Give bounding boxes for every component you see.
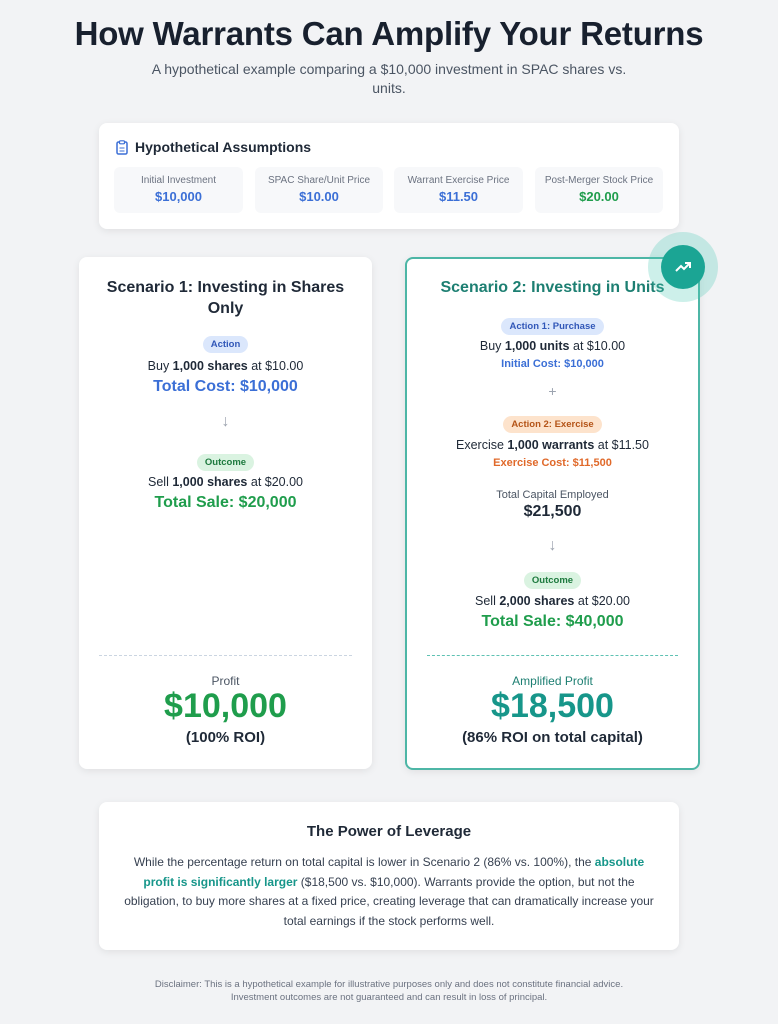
action 2: Action 2: Exercise: [511, 419, 594, 430]
panel: scenario 1: Buy 1,000 shares at $10.00: [148, 359, 303, 373]
panel: scenario 1: $10,000: [164, 687, 287, 725]
subtitle: A hypothetical example comparing a $10,000 investment in SPAC shares vs. units.: [152, 61, 626, 96]
box: initial investment: [114, 167, 243, 213]
disclaimer: [155, 979, 623, 1003]
profit: Profit: [211, 674, 240, 688]
icon: clipboard: [116, 140, 128, 155]
box: post-merger: Post-Merger Stock Price: [545, 175, 653, 186]
panel: scenario 1: (100% ROI): [186, 729, 265, 746]
box: post-merger: $20.00: [579, 189, 619, 204]
outcome: Outcome: [532, 575, 573, 586]
box: price: [255, 167, 383, 213]
heading: The Power of Leverage: [307, 823, 471, 840]
panel: scenario 2: $18,500: [491, 687, 614, 725]
box: price: $10.00: [299, 189, 339, 204]
heading: Scenario 1: Investing in Shares Only: [107, 279, 344, 317]
panel: scenario 2: ↓: [548, 537, 556, 554]
box: exercise: $11.50: [439, 189, 478, 204]
box: initial investment: Initial Investment: [141, 175, 216, 186]
panel: scenario 2: [405, 257, 700, 770]
disclaimer: Investment outcomes are not guaranteed and can result in loss of principal.: [231, 992, 547, 1003]
heading: Hypothetical Assumptions: [135, 139, 311, 155]
panel: scenario 1: [79, 257, 372, 769]
panel: scenario 2: Initial Cost: $10,000: [501, 358, 604, 370]
action pill: Action: [211, 339, 240, 350]
panel: scenario 2: (86% ROI on total capital): [462, 729, 643, 746]
total capital: Total Capital Employed: [496, 489, 609, 501]
box: exercise: [394, 167, 523, 213]
panel: scenario 2: +: [548, 383, 557, 399]
box: initial investment: $10,000: [155, 189, 202, 204]
panel: scenario 2: Exercise Cost: $11,500: [493, 457, 612, 469]
panel: scenario 2: Exercise 1,000 warrants at $11.50: [456, 438, 649, 452]
panel: scenario 1: Total Cost: $10,000: [153, 378, 298, 395]
box: exercise: Warrant Exercise Price: [408, 175, 509, 186]
panel: scenario 2: Total Sale: $40,000: [482, 613, 624, 630]
disclaimer: Disclaimer: This is a hypothetical example for illustrative purposes only and does not constitute financial advice.: [155, 979, 623, 990]
box: post-merger: [535, 167, 663, 213]
heading: Scenario 2: Investing in Units: [440, 279, 665, 296]
panel: scenario 1: Total Sale: $20,000: [154, 494, 296, 511]
text: While the percentage return on total capital is lower in Scenario 2 (86% vs. 100%), the absolute profit is significantly larger ($18,500 vs. $10,000). Warrants provide the option, but not the obligation, to buy more shares at a fixed price, creating leverage that can dramatically increase your total earnings if the stock performs well.: [124, 855, 654, 928]
panel: scenario 1: Sell 1,000 shares at $20.00: [148, 475, 303, 489]
icon: trending up badge: [648, 232, 718, 302]
panel: scenario 2: Sell 2,000 shares at $20.00: [475, 594, 630, 608]
action 1: Action 1: Purchase: [509, 321, 596, 332]
panel: power of leverage: [99, 802, 679, 950]
panel: scenario 2: Buy 1,000 units at $10.00: [480, 339, 625, 353]
arrow: ↓: [222, 413, 230, 430]
box: price: SPAC Share/Unit Price: [268, 175, 370, 186]
panel: scenario 2: $21,500: [524, 503, 581, 520]
panel: assumptions: [99, 123, 679, 229]
title: How Warrants Can Amplify Your Returns: [75, 15, 703, 52]
amplified profit: Amplified Profit: [512, 674, 593, 688]
outcome pill: Outcome: [205, 457, 246, 468]
